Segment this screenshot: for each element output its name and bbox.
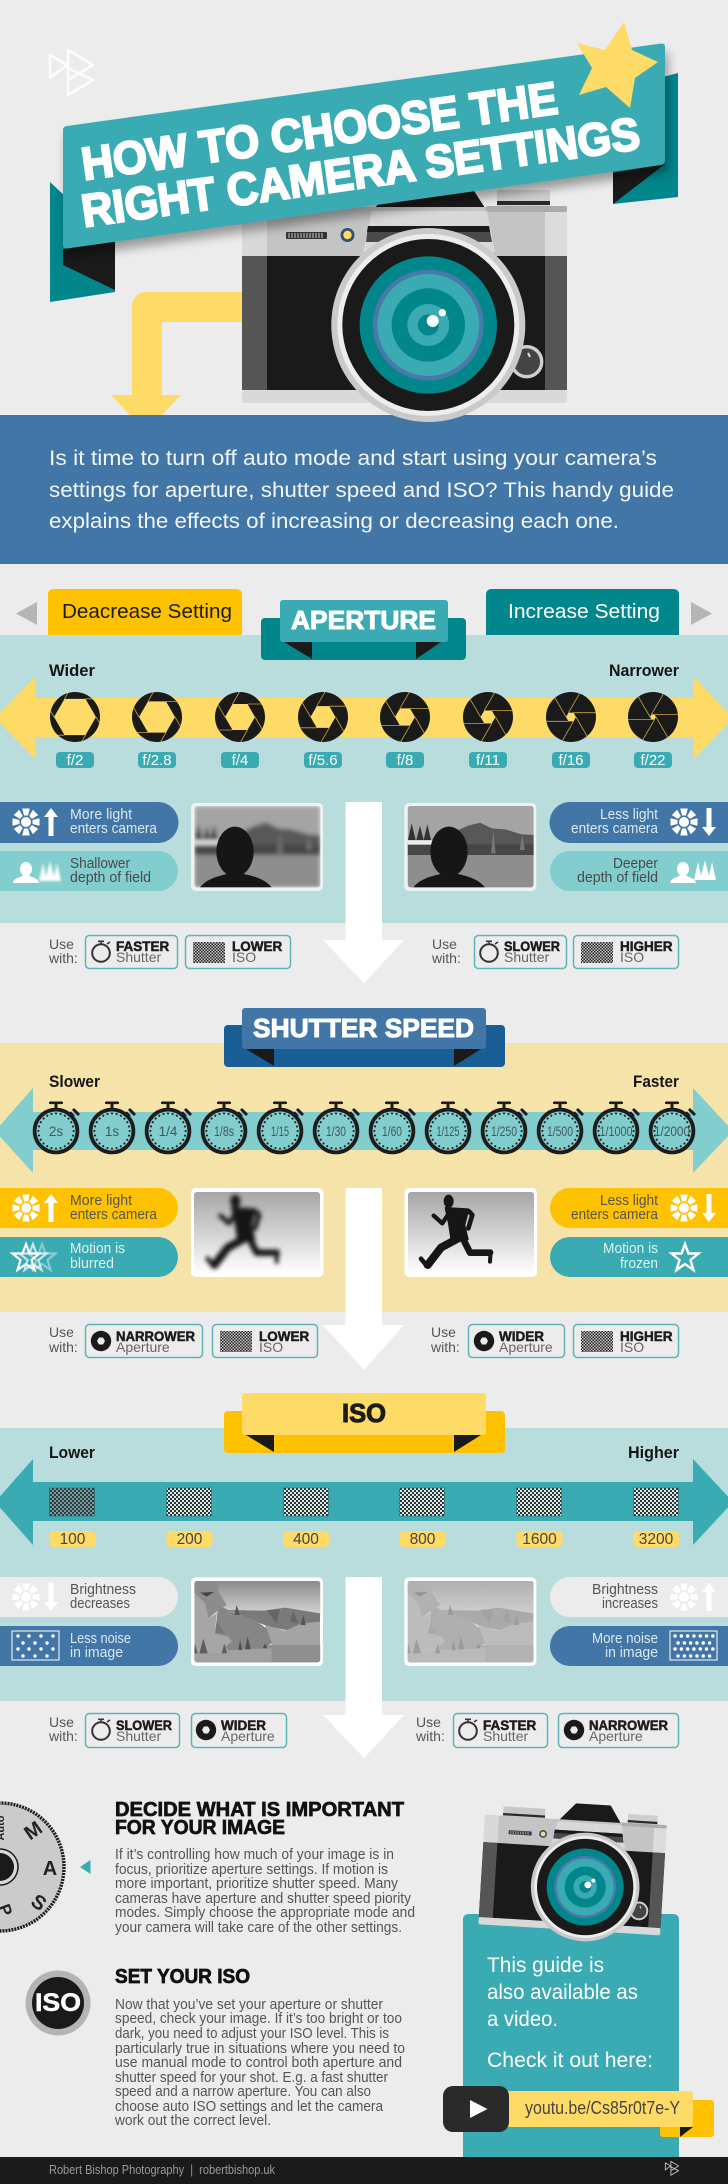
- heading: decide what is important: FOR YOUR IMAGE: [115, 1817, 285, 1839]
- iso scale arrow: [0, 1459, 728, 1545]
- iso right: brightness increases: Brightness: [592, 1581, 658, 1598]
- iso right: use with: with:: [415, 1728, 445, 1744]
- increase setting tab: [486, 589, 712, 635]
- iso right: brightness increases: increases: [602, 1595, 658, 1612]
- iso left: use with: Shutter: [116, 1728, 161, 1744]
- aperture right: less light: [549, 802, 728, 843]
- body text: set iso: dark, you need to adjust your ISO level. This is: [115, 2025, 389, 2042]
- iso left: use with: WIDER: [221, 1718, 266, 1733]
- yellow arrow from camera to intro: [111, 292, 242, 432]
- shutter left: motion blurred: [0, 1237, 178, 1277]
- aperture left: use with: with:: [48, 950, 78, 966]
- iso left: use with: Aperture: [221, 1728, 275, 1744]
- aperture right: use with: HIGHER: [620, 939, 673, 954]
- icon: mode dial: S: [27, 1890, 50, 1916]
- body text: decide: your camera will take care of the other settings.: [115, 1919, 402, 1936]
- shutter right: use with: WIDER: [499, 1329, 544, 1344]
- photo: high noise landscape: [404, 1577, 536, 1666]
- aperture heading ribbon: [261, 600, 466, 660]
- iso left: brightness decreases: [0, 1577, 178, 1617]
- aperture heading ribbon: APERTURE: [291, 605, 436, 635]
- aperture right: deeper depth: depth of field: [577, 869, 658, 886]
- iso value labels: 200: [177, 1531, 203, 1548]
- f-stop labels: f/16: [558, 752, 584, 769]
- body text: set iso: choose auto ISO settings and let the camera: [115, 2098, 384, 2115]
- iso left: use with: SLOWER: [116, 1718, 172, 1733]
- iso value labels: 3200: [639, 1531, 674, 1548]
- iso right: use with: [415, 1714, 678, 1748]
- panel: shutter speed: [0, 1043, 728, 1312]
- youtube link ribbon: [443, 2086, 714, 2137]
- iso noise swatches: [50, 1488, 678, 1516]
- iso left: brightness decreases: Brightness: [70, 1581, 136, 1598]
- body text: set iso: use manual mode to control both aperture and: [115, 2054, 402, 2071]
- aperture left: use with: FASTER: [116, 939, 170, 954]
- shutter scale stopwatches: 1/250: [491, 1124, 517, 1139]
- shutter scale stopwatches: 1/30: [326, 1124, 346, 1139]
- body text: set iso: speed and a narrow aperture. You can also: [115, 2083, 371, 2100]
- f-stop labels: f/2.8: [142, 752, 172, 769]
- shutter scale stopwatches: 1/15: [271, 1124, 289, 1139]
- shutter left: use with: Use: [49, 1324, 74, 1340]
- shutter scale stopwatches: 1/1000: [600, 1124, 632, 1139]
- aperture right: deeper depth: [550, 851, 728, 891]
- shutter scale stopwatches: 1/4: [159, 1124, 178, 1139]
- shutter right: use with: Use: [431, 1324, 456, 1340]
- iso value labels: 1600: [522, 1531, 557, 1548]
- panel: aperture: [0, 635, 728, 923]
- body text: decide: modes. Simply choose the appropriate mode and: [115, 1904, 415, 1921]
- intro panel: explains the effects of increasing or decreasing each one.: [49, 510, 619, 533]
- iso value labels: 800: [410, 1531, 436, 1548]
- iso right: more noise: More noise: [592, 1630, 658, 1647]
- icon: iso badge: ISO: [35, 1989, 81, 2017]
- iso right: use with: NARROWER: [589, 1718, 668, 1733]
- aperture left: use with: [48, 936, 290, 968]
- shutter scale arrow: [0, 1088, 728, 1173]
- iso left: less noise: Less noise: [70, 1630, 131, 1647]
- f-stop labels: f/4: [232, 752, 248, 769]
- iso value labels: 100: [60, 1531, 86, 1548]
- shutter speed heading ribbon: SHUTTER SPEED: [253, 1013, 474, 1043]
- icon: mode dial: M: [20, 1817, 47, 1845]
- body text: set iso: speed, check your image. If it’s too bright or too: [115, 2010, 402, 2027]
- shutter right: use with: ISO: [620, 1339, 644, 1355]
- f-stop labels: f/11: [476, 752, 500, 769]
- shutter right: motion frozen: [550, 1237, 728, 1277]
- body text: decide: focus, prioritize aperture settings. If motion is: [115, 1861, 388, 1878]
- heading: set your iso: SET YOUR ISO: [115, 1966, 250, 1988]
- aperture left: shallower depth: depth of field: [70, 869, 151, 886]
- shutter left: use with: [48, 1324, 318, 1358]
- photo: deep depth of field: [404, 803, 536, 891]
- iso right: use with: FASTER: [483, 1718, 537, 1733]
- iso right: more noise: [550, 1626, 728, 1666]
- photo: frozen runner: [404, 1188, 537, 1277]
- icon: mode dial: A: [43, 1858, 57, 1880]
- shutter right: use with: with:: [430, 1339, 460, 1355]
- iso right: use with: Aperture: [589, 1728, 643, 1744]
- camera illustration: [242, 177, 567, 422]
- shutter left: use with: Aperture: [116, 1339, 170, 1355]
- youtube link ribbon: youtu.be/Cs85r0t7e-Y: [525, 2098, 680, 2118]
- body text: decide: If it’s controlling how much of your image is in: [115, 1846, 394, 1863]
- aperture left: use with: Shutter: [116, 949, 161, 965]
- photo: low noise landscape: [191, 1577, 323, 1666]
- aperture right: use with: ISO: [620, 949, 644, 965]
- iso heading ribbon: ISO: [342, 1398, 386, 1428]
- iso right: use with: Shutter: [483, 1728, 528, 1744]
- decrease setting tab: [16, 589, 242, 635]
- panel: video: a video.: [487, 2008, 558, 2031]
- icon: mode dial: [0, 1803, 64, 1931]
- body text: set iso: Now that you’ve set your aperture or shutter: [115, 1996, 383, 2013]
- shutter scale stopwatches: 1/500: [547, 1124, 573, 1139]
- body text: set iso: [114, 1996, 405, 2129]
- aperture scale irises: [50, 692, 678, 742]
- title ribbon: HOW TO CHOOSE THE: [78, 72, 561, 190]
- aperture right: less light: enters camera: [571, 820, 659, 837]
- title ribbon: RIGHT CAMERA SETTINGS: [78, 107, 643, 237]
- label: lower: Lower: [49, 1443, 95, 1462]
- body text: decide: [115, 1846, 415, 1936]
- aperture left: more light: More light: [70, 806, 133, 823]
- iso left: use with: [48, 1714, 286, 1748]
- shutter right: less light: Less light: [600, 1192, 659, 1209]
- shutter left: more light: More light: [70, 1192, 133, 1209]
- aperture left: shallower depth: [0, 851, 178, 891]
- panel: video: also available as: [487, 1981, 638, 2004]
- photo: shallow depth of field: [191, 803, 323, 891]
- f-stop labels: f/5.6: [308, 752, 338, 769]
- shutter left: motion blurred: blurred: [70, 1255, 114, 1272]
- aperture right: less light: Less light: [600, 806, 659, 823]
- panel: video: Check it out here:: [487, 2049, 653, 2072]
- intro panel: Is it time to turn off auto mode and start using your camera’s: [49, 447, 657, 470]
- shutter left: use with: LOWER: [259, 1329, 309, 1344]
- f-stop labels: f/8: [397, 752, 413, 769]
- pointer triangle: [80, 1860, 90, 1874]
- heading: decide what is important: [115, 1799, 404, 1839]
- aperture right: use with: Shutter: [504, 949, 549, 965]
- iso value labels: 400: [293, 1531, 319, 1548]
- shutter left: more light: [0, 1188, 178, 1228]
- panel: video: This guide is: [487, 1954, 604, 1977]
- shutter right: use with: Aperture: [499, 1339, 553, 1355]
- shutter scale stopwatches: [35, 1102, 695, 1152]
- body text: decide: cameras have aperture and shutter speed piority: [115, 1890, 411, 1907]
- shutter right: use with: [430, 1324, 678, 1358]
- shutter right: use with: HIGHER: [620, 1329, 673, 1344]
- iso left: less noise: in image: [70, 1644, 123, 1661]
- aperture right: use with: with:: [431, 950, 461, 966]
- label: higher: Higher: [628, 1443, 679, 1462]
- shutter scale stopwatches: 1/8s: [214, 1124, 234, 1139]
- shutter left: use with: with:: [48, 1339, 78, 1355]
- shutter left: more light: enters camera: [70, 1206, 158, 1223]
- shutter right: less light: [550, 1188, 728, 1228]
- iso left: brightness decreases: decreases: [70, 1595, 130, 1612]
- label: slower: Slower: [49, 1072, 100, 1091]
- iso heading ribbon: [224, 1393, 505, 1453]
- iso value labels: [50, 1531, 679, 1548]
- iso left: use with: Use: [49, 1714, 74, 1730]
- aperture left: more light: enters camera: [70, 820, 158, 837]
- label: faster: Faster: [633, 1072, 679, 1091]
- shutter speed heading ribbon: [224, 1008, 505, 1067]
- shutter right: motion frozen: frozen: [620, 1255, 658, 1272]
- body text: decide: more important, prioritize shutter speed. Many: [115, 1875, 398, 1892]
- label: wider: Wider: [49, 661, 95, 680]
- panel: iso: [0, 1428, 728, 1701]
- title ribbon: [50, 22, 678, 302]
- white down arrow 2: [323, 1188, 404, 1370]
- small camera illustration: [478, 1798, 668, 1946]
- photo: blurred runner: [191, 1188, 324, 1277]
- shutter left: use with: NARROWER: [116, 1329, 195, 1344]
- f-stop labels: [56, 752, 672, 769]
- aperture scale arrow: [0, 677, 728, 759]
- aperture left: use with: LOWER: [232, 939, 282, 954]
- footer bar: [0, 2157, 728, 2184]
- shutter left: use with: ISO: [259, 1339, 283, 1355]
- shutter right: less light: enters camera: [571, 1206, 659, 1223]
- brand logo: [50, 50, 93, 95]
- aperture right: use with: SLOWER: [504, 939, 560, 954]
- heading: decide what is important: DECIDE WHAT IS IMPORTANT: [115, 1799, 404, 1821]
- icon: iso badge: [26, 1970, 90, 2036]
- body text: set iso: shutter speed for your shot. E.g. a fast shutter: [115, 2069, 388, 2086]
- aperture right: use with: Use: [432, 936, 457, 952]
- white down arrow 1: [323, 802, 404, 983]
- iso left: less noise: [0, 1626, 178, 1666]
- aperture right: deeper depth: Deeper: [613, 855, 658, 872]
- panel: video: [463, 1914, 679, 2157]
- aperture left: use with: ISO: [232, 949, 256, 965]
- intro panel: [0, 415, 728, 564]
- intro panel: settings for aperture, shutter speed and ISO? This handy guide: [49, 479, 674, 502]
- label: narrower: Narrower: [609, 661, 679, 680]
- aperture left: more light: [0, 802, 178, 843]
- iso right: use with: Use: [416, 1714, 441, 1730]
- iso right: more noise: in image: [605, 1644, 658, 1661]
- shutter scale stopwatches: 1/60: [382, 1124, 402, 1139]
- aperture left: shallower depth: Shallower: [70, 855, 130, 872]
- shutter right: motion frozen: Motion is: [603, 1240, 658, 1257]
- body text: set iso: particularly true in situations where you need to: [115, 2040, 405, 2057]
- f-stop labels: f/22: [640, 752, 666, 769]
- shutter scale stopwatches: 1/2000: [654, 1124, 690, 1139]
- iso right: brightness increases: [550, 1577, 728, 1617]
- footer bar: Robert Bishop Photography | robertbishop.uk: [49, 2162, 275, 2177]
- iso left: use with: with:: [48, 1728, 78, 1744]
- shutter left: motion blurred: Motion is: [70, 1240, 125, 1257]
- decrease setting tab: Deacrease Setting: [62, 601, 232, 623]
- body text: set iso: work out the correct level.: [114, 2112, 271, 2129]
- aperture right: use with: [431, 936, 678, 968]
- shutter scale stopwatches: 1/125: [436, 1124, 460, 1139]
- shutter scale stopwatches: 2s: [49, 1124, 63, 1139]
- shutter scale stopwatches: 1s: [105, 1124, 119, 1139]
- aperture left: use with: Use: [49, 936, 74, 952]
- increase setting tab: Increase Setting: [508, 601, 660, 623]
- f-stop labels: f/2: [67, 752, 83, 769]
- white down arrow 3: [323, 1577, 404, 1758]
